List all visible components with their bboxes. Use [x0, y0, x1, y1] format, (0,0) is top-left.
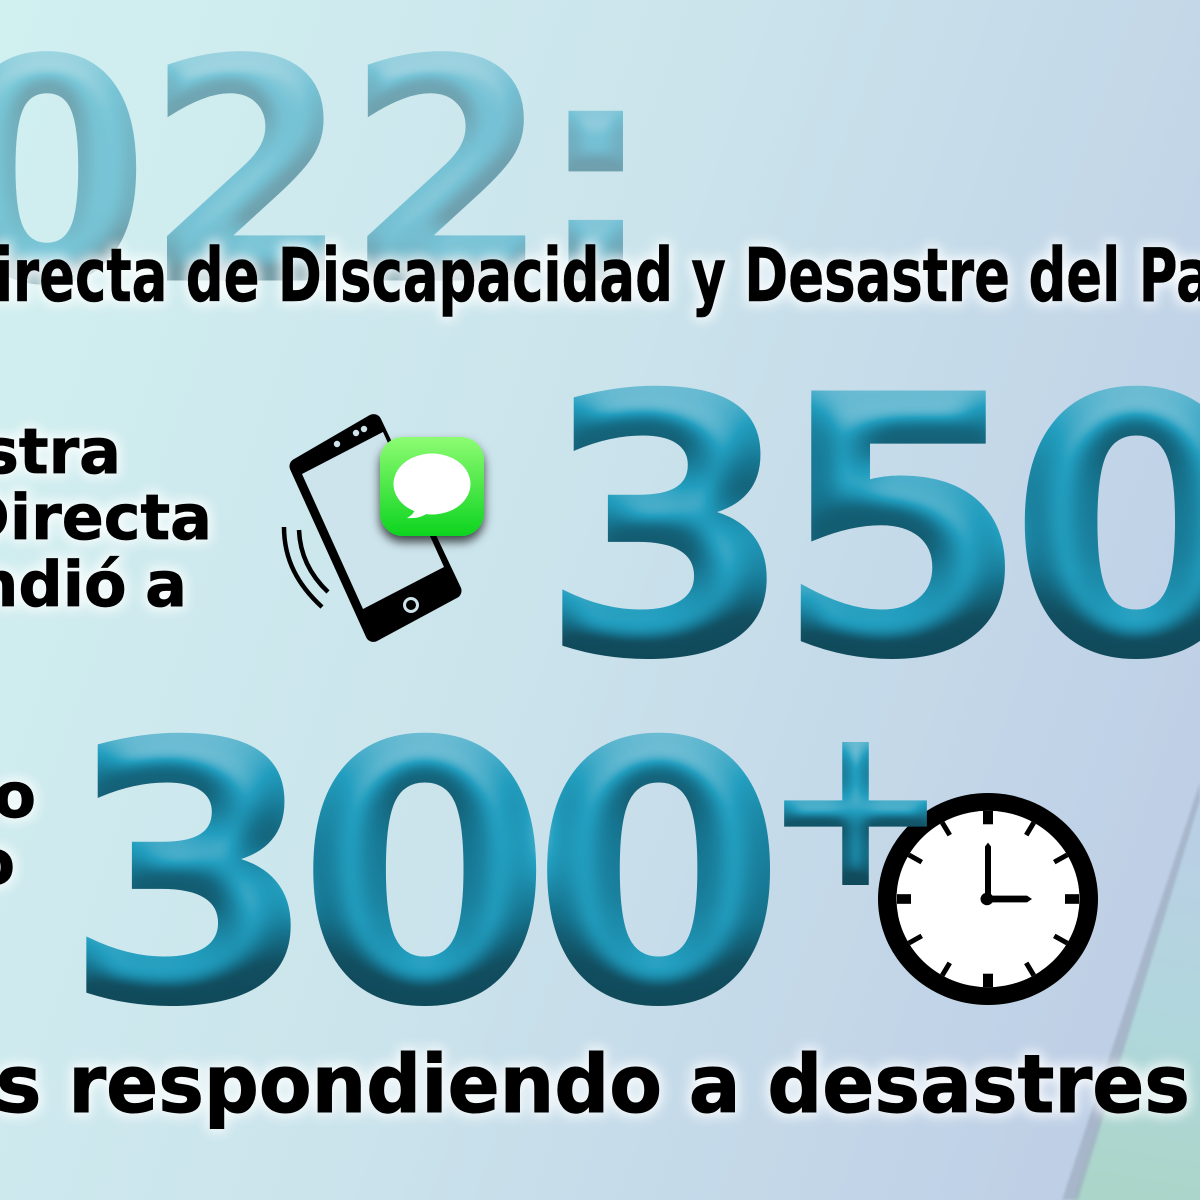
decorative corner panel [1062, 782, 1200, 1200]
left text block: hotline [0, 415, 212, 621]
icon: message bubble [380, 437, 484, 536]
plus sign: + [760, 673, 951, 939]
bottom caption: s respondiendo a desastres [0, 1039, 1190, 1131]
icon: vibrating phone [284, 422, 454, 634]
icon: clock [878, 793, 1098, 1005]
left text fragments [0, 759, 36, 899]
big number: 300+: 300 [64, 669, 771, 1083]
